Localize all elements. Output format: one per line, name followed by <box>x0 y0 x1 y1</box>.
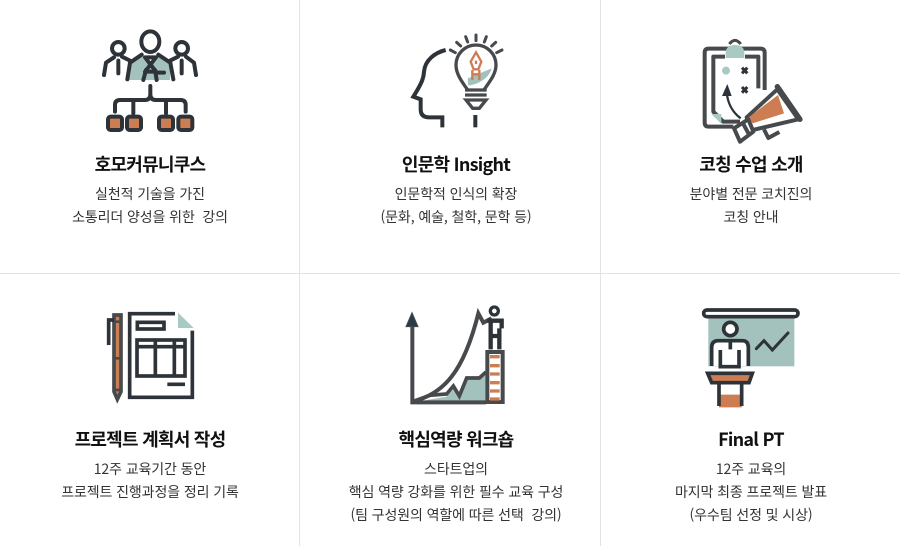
heading: Final PT <box>718 426 784 452</box>
icon: people organisation chart <box>102 29 198 132</box>
panel: 호모커뮤니쿠스 <box>72 29 228 227</box>
icon: growth curve and climber <box>405 305 505 404</box>
panel: 프로젝트 계획서 작성 <box>61 312 239 502</box>
icon: pen and document <box>106 312 194 404</box>
panel: 코칭 수업 소개 <box>690 38 812 227</box>
text block: 12주 교육의 마지막 최종 프로젝트 발표 (우수팀 선정 및 시상) <box>675 459 827 525</box>
text block: 스타트업의 핵심 역량 강화를 위한 필수 교육 구성 (팀 구성원의 역할에 따른 선택 강의) <box>349 459 563 525</box>
heading: 호모커뮤니쿠스 <box>95 151 205 177</box>
heading: 핵심역량 워크숍 <box>399 426 513 452</box>
panel: Final PT <box>675 308 827 525</box>
heading: 코칭 수업 소개 <box>699 151 803 177</box>
heading: 인문학 Insight <box>402 151 510 177</box>
icon: clipboard and megaphone <box>702 38 803 144</box>
text block: 인문학적 인식의 확장 (문화, 예술, 철학, 문학 등) <box>380 184 531 227</box>
icon: presenter at podium <box>702 308 800 408</box>
text block: 실천적 기술을 가진 소통리더 양성을 위한 강의 <box>72 184 228 227</box>
text block: 12주 교육기간 동안 프로젝트 진행과정을 정리 기록 <box>61 459 239 502</box>
text block: 분야별 전문 코치진의 코칭 안내 <box>690 184 812 227</box>
panel: 인문학 Insight <box>380 34 531 227</box>
icon: head with light bulb <box>410 34 504 128</box>
panel: 핵심역량 워크숍 <box>349 305 563 525</box>
heading: 프로젝트 계획서 작성 <box>75 426 225 452</box>
